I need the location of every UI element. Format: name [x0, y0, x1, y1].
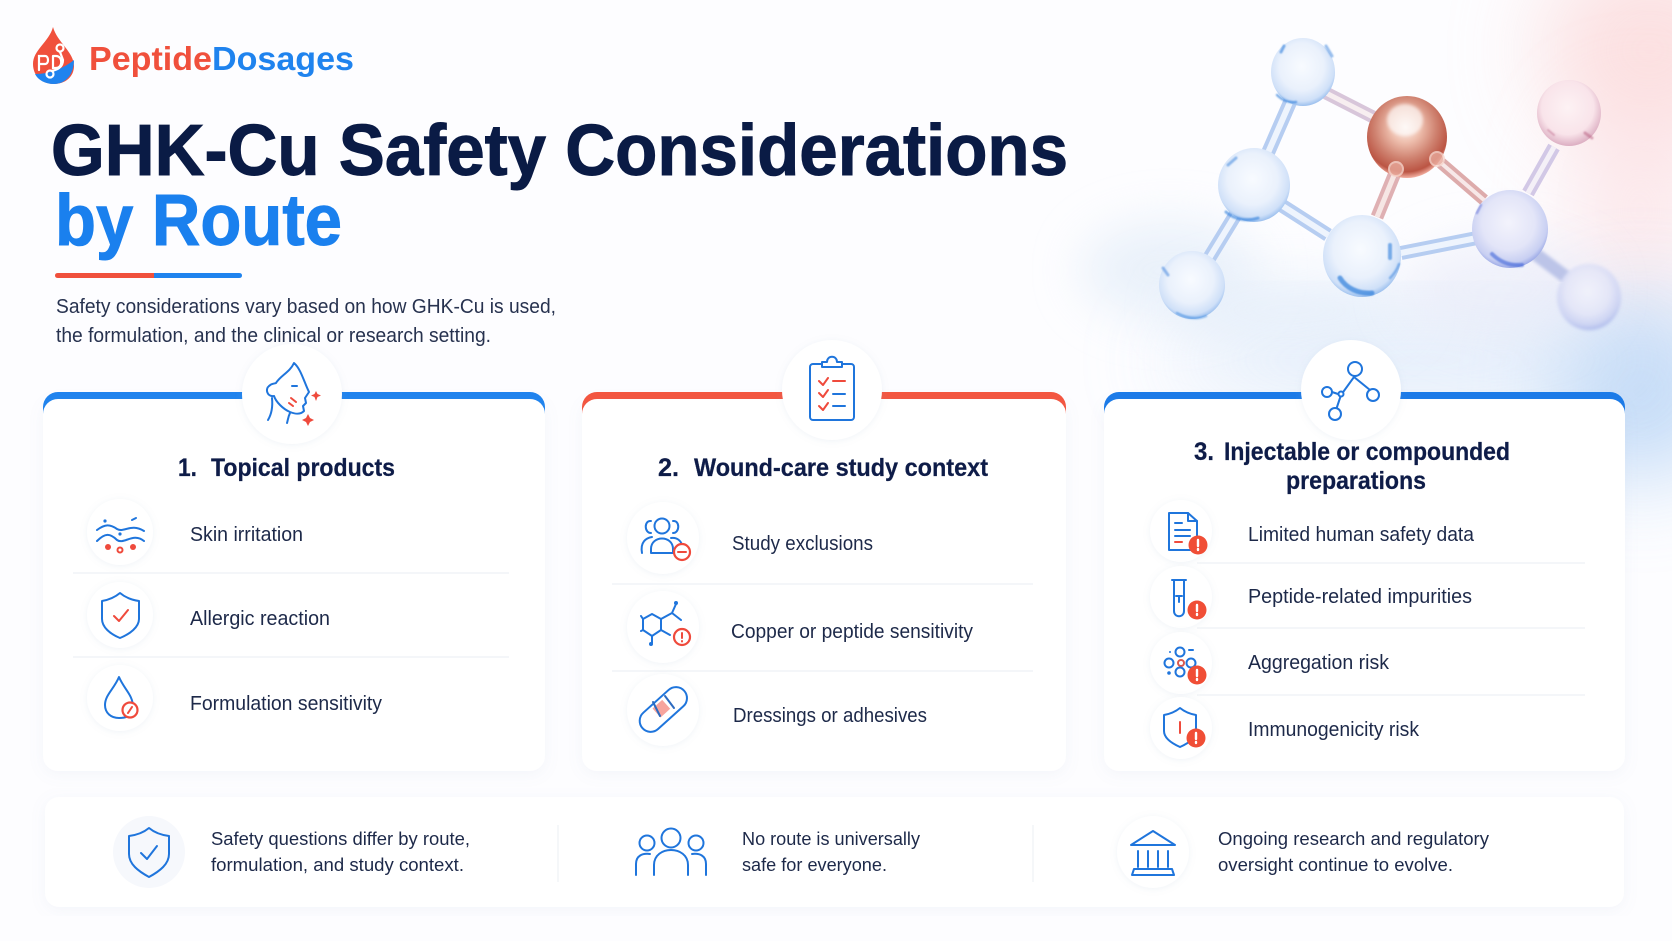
molecule bonds [1208, 93, 1566, 277]
row: immunogenicity risk [1150, 697, 1420, 759]
panel: key takeaways footer [45, 797, 1624, 907]
title: by Route [55, 181, 342, 261]
label: Study exclusions [732, 533, 873, 555]
icon: molecule with alert [627, 591, 699, 663]
row: peptide-related impurities [1150, 566, 1472, 628]
takeaway: no universal safety [636, 828, 920, 875]
row: aggregation risk [1150, 632, 1390, 694]
icon: adhesive bandage [627, 674, 699, 746]
icon: clipboard checklist [782, 340, 882, 440]
heading: Wound-care study context [694, 454, 989, 482]
icon: branched molecule [1301, 340, 1401, 440]
text [742, 829, 920, 875]
heading: 2. [658, 454, 679, 482]
title [51, 111, 1068, 261]
row: skin irritation [87, 499, 303, 565]
heading: 3. [1194, 438, 1214, 466]
row: copper or peptide sensitivity [627, 591, 973, 663]
label: Skin irritation [190, 524, 303, 546]
icon: shield check [113, 816, 185, 888]
title: GHK-Cu Safety Considerations [51, 111, 1068, 191]
icon: shield with alert [1150, 697, 1212, 759]
label: Peptide-related impurities [1248, 586, 1472, 608]
icon: droplet logo [33, 27, 74, 84]
text: No route is universally [742, 829, 920, 849]
row: allergic reaction [87, 582, 330, 648]
footer background [45, 797, 1624, 907]
intro text: Safety considerations vary based on how GHK-Cu is used, [56, 296, 556, 318]
label: Aggregation risk [1248, 652, 1390, 674]
label: Copper or peptide sensitivity [731, 621, 973, 643]
icon: test tube with alert [1150, 566, 1212, 628]
logo [33, 27, 354, 84]
icon: document with alert [1150, 500, 1212, 562]
intro text: the formulation, and the clinical or research setting. [56, 325, 491, 347]
heading: preparations [1286, 467, 1426, 495]
icon: skin layers [87, 499, 153, 565]
row: dressings or adhesives [627, 674, 927, 746]
intro text [56, 296, 556, 347]
icon: group of people [636, 828, 706, 875]
takeaway: research and oversight [1117, 816, 1489, 888]
panel background [1104, 392, 1625, 771]
icon: particle cluster with alert [1150, 632, 1212, 694]
label: Immunogenicity risk [1248, 719, 1420, 741]
text [1218, 829, 1489, 875]
text: Ongoing research and regulatory [1218, 829, 1489, 849]
label: Limited human safety data [1248, 524, 1475, 546]
icon: people with minus [627, 502, 699, 574]
icon: shield with check [87, 582, 153, 648]
panel: injectable or compounded preparations [1104, 340, 1625, 771]
takeaway: safety questions [113, 816, 470, 888]
text [211, 829, 470, 875]
heading: Topical products [211, 454, 395, 482]
brand name: Dosages [212, 40, 354, 77]
text: formulation, and study context. [211, 855, 464, 875]
label: Formulation sensitivity [190, 693, 382, 715]
text: safe for everyone. [742, 855, 887, 875]
icon: face with skin sparkles [242, 344, 342, 444]
text: oversight continue to evolve. [1218, 855, 1453, 875]
title underline [55, 273, 242, 278]
panel background [43, 392, 545, 771]
heading [1194, 438, 1510, 495]
heading: Injectable or compounded [1224, 438, 1510, 466]
molecule atoms [1159, 38, 1621, 330]
row: limited human safety data [1150, 500, 1475, 562]
text: Safety questions differ by route, [211, 829, 470, 849]
icon: institution building [1117, 816, 1189, 888]
panel: topical products [43, 344, 545, 771]
label: Dressings or adhesives [733, 705, 927, 727]
row: study exclusions [627, 502, 873, 574]
molecule illustration [1159, 38, 1621, 330]
label: Allergic reaction [190, 608, 330, 630]
icon: droplet with gauge [87, 665, 153, 731]
row: formulation sensitivity [87, 665, 382, 731]
panel: wound-care study context [582, 340, 1066, 771]
brand name: Peptide [89, 40, 212, 77]
panel background [582, 392, 1066, 771]
heading: 1. [178, 454, 197, 482]
